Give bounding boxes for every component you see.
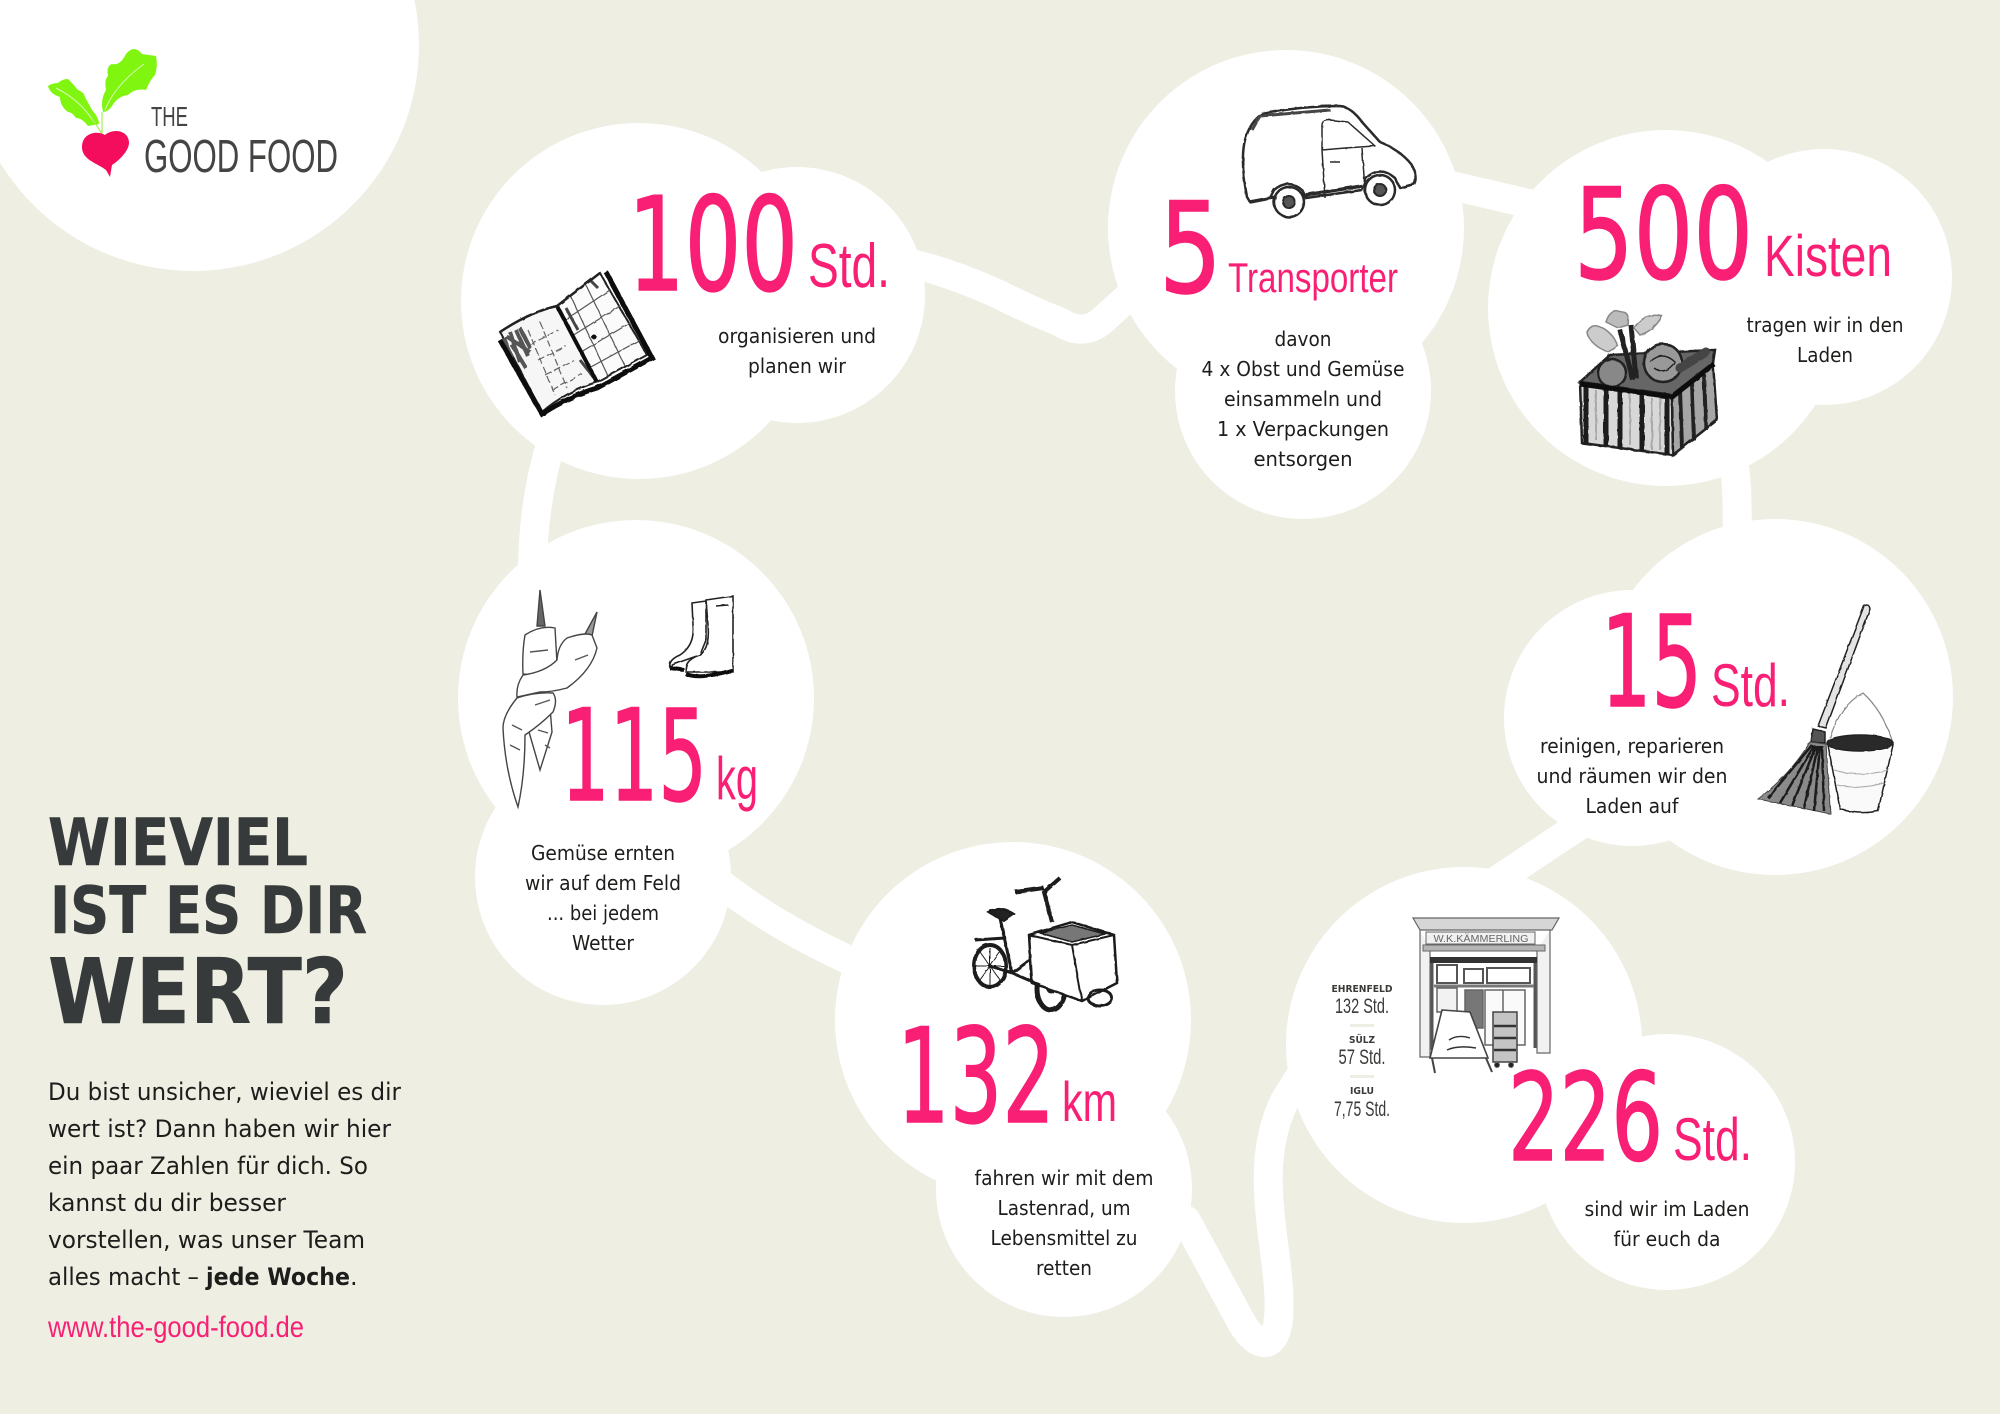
intro text: Du bist unsicher, wieviel es dir xyxy=(48,1078,401,1106)
connecting path between the panels xyxy=(533,183,1737,1343)
description: 1 x Verpackungen xyxy=(1217,417,1389,441)
description xyxy=(974,1166,1154,1280)
icon: radish logo xyxy=(48,49,157,177)
intro text: ein paar Zahlen für dich. So xyxy=(48,1152,368,1180)
title: WERT? xyxy=(48,940,348,1045)
panel: 15 Std. xyxy=(1504,519,1953,875)
logo wordmark: THE xyxy=(151,101,188,132)
opening hours per location: SÜLZ xyxy=(1349,1032,1375,1046)
description: und räumen wir den xyxy=(1536,764,1728,788)
icon: rubber boots xyxy=(670,596,733,676)
description: Lastenrad, um xyxy=(998,1196,1130,1220)
number: 226 xyxy=(1508,1048,1663,1189)
unit: Std. xyxy=(1711,652,1790,719)
description: reinigen, reparieren xyxy=(1540,734,1724,758)
intro text: vorstellen, was unser Team xyxy=(48,1226,365,1254)
panel: 226 Std. xyxy=(1286,867,1795,1290)
description: Gemüse ernten xyxy=(531,841,675,865)
description: ... bei jedem xyxy=(547,901,659,925)
description: sind wir im Laden xyxy=(1584,1197,1750,1221)
number: 100 xyxy=(628,169,798,321)
icon: carrots xyxy=(503,590,597,807)
unit: Std. xyxy=(808,232,890,301)
panel: 100 Std. xyxy=(461,123,925,479)
opening hours per location: EHRENFELD xyxy=(1332,984,1392,995)
panel: 115 kg xyxy=(458,520,814,1005)
shop lettering: W.K.KÄMMERLING xyxy=(1434,933,1529,945)
unit: Kisten xyxy=(1764,224,1892,289)
unit: Std. xyxy=(1673,1106,1752,1173)
number: 5 xyxy=(1159,175,1222,322)
icon: broom and bucket xyxy=(1758,605,1893,814)
description: wir auf dem Feld xyxy=(525,871,681,895)
description: entsorgen xyxy=(1254,447,1352,471)
title: IST ES DIR xyxy=(50,874,367,949)
unit: km xyxy=(1062,1070,1117,1133)
title: WIEVIEL xyxy=(48,806,308,881)
description: Wetter xyxy=(572,931,635,955)
intro text: kannst du dir besser xyxy=(48,1189,286,1217)
description xyxy=(718,324,876,378)
description: fahren wir mit dem xyxy=(974,1166,1154,1190)
description: Lebensmittel zu xyxy=(990,1226,1138,1250)
description: Laden auf xyxy=(1586,794,1679,818)
opening hours per location: IGLU xyxy=(1350,1086,1374,1097)
icon: open book xyxy=(500,272,652,414)
description: retten xyxy=(1036,1256,1092,1280)
panel: logo xyxy=(0,0,419,271)
icon: cargo bike xyxy=(974,878,1117,1010)
description: Laden xyxy=(1797,343,1853,367)
description: für euch da xyxy=(1614,1227,1720,1251)
description: 4 x Obst und Gemüse xyxy=(1202,357,1404,381)
panel: 5 Transporter xyxy=(1108,50,1464,519)
logo wordmark xyxy=(144,101,338,182)
description: organisieren und xyxy=(718,324,876,348)
intro text: jede Woche xyxy=(205,1263,350,1291)
intro text xyxy=(48,1078,401,1291)
intro text: . xyxy=(350,1263,358,1291)
opening hours per location: 7,75 Std. xyxy=(1334,1098,1390,1121)
panel: 132 km xyxy=(835,842,1192,1317)
number: 15 xyxy=(1601,588,1702,736)
title xyxy=(48,806,367,1045)
description: tragen wir in den xyxy=(1746,313,1904,337)
description: planen wir xyxy=(748,354,847,378)
description xyxy=(1202,327,1404,471)
description: einsammeln und xyxy=(1224,387,1382,411)
website link: www.the-good-food.de xyxy=(47,1311,304,1344)
icon: shop front xyxy=(1413,918,1559,1073)
logo wordmark: GOOD FOOD xyxy=(144,130,338,182)
description xyxy=(525,841,681,955)
unit: Transporter xyxy=(1228,254,1398,301)
unit: kg xyxy=(716,745,758,812)
description: davon xyxy=(1274,327,1332,351)
number: 132 xyxy=(897,1000,1055,1153)
panel: 500 Kisten xyxy=(1488,130,1952,486)
number: 115 xyxy=(561,682,707,830)
icon: vegetable crate xyxy=(1580,311,1717,455)
description xyxy=(1584,1197,1750,1251)
intro text: wert ist? Dann haben wir hier xyxy=(48,1115,391,1143)
description xyxy=(1536,734,1728,818)
opening hours per location: 57 Std. xyxy=(1338,1046,1386,1069)
intro text: alles macht – xyxy=(48,1263,199,1291)
opening hours per location xyxy=(1332,984,1392,1121)
number: 500 xyxy=(1574,161,1753,308)
opening hours per location: 132 Std. xyxy=(1335,995,1389,1018)
icon: delivery van xyxy=(1243,106,1416,217)
description xyxy=(1746,313,1904,367)
